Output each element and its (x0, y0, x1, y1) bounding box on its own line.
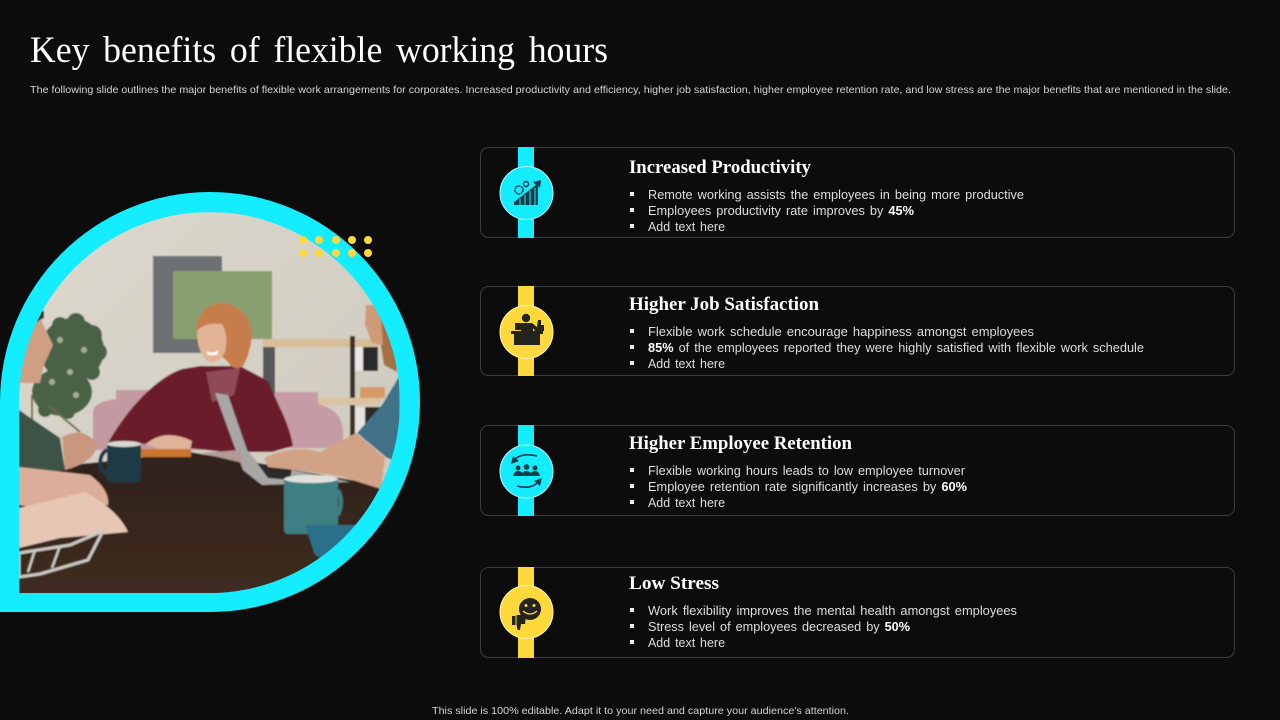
bullet list: Add text here (648, 635, 725, 650)
title: Key benefits of flexible working hours (30, 30, 608, 71)
bullet list: Add text here (648, 495, 725, 510)
heading: Increased Productivity (629, 157, 811, 178)
bullet list: Flexible working hours leads to low employee turnover (648, 463, 966, 478)
panel: increased productivity (480, 147, 1234, 238)
bullet list: Add text here (648, 356, 725, 371)
bullet list (630, 463, 967, 510)
sofa (93, 390, 210, 450)
bullet list: Work flexibility improves the mental health amongst employees (648, 603, 1017, 618)
table (19, 452, 392, 594)
bullet list: 85% of the employees reported they were highly satisfied with flexible work schedule (648, 340, 1144, 355)
heading: Higher Employee Retention (629, 433, 852, 454)
notebook (306, 524, 356, 558)
right woman (380, 318, 398, 372)
heading: Low Stress (629, 573, 719, 594)
bullet list (630, 324, 1144, 371)
bullet list: Remote working assists the employees in being more productive (648, 187, 1024, 202)
woman in red (108, 303, 293, 452)
plant (32, 313, 107, 419)
panel: low stress (480, 567, 1234, 658)
photo panel: team meeting in cyan teardrop frame (0, 192, 420, 612)
meeting photo (19, 212, 401, 594)
bullet list: Stress level of employees decreased by 50% (648, 619, 910, 634)
heading: Higher Job Satisfaction (629, 294, 819, 315)
icon: smiley with thumbs down (512, 598, 541, 630)
cyan frame (0, 192, 420, 612)
footer note: This slide is 100% editable. Adapt it to your need and capture your audience's attention. (432, 705, 849, 717)
bullet list (630, 603, 1017, 650)
icon: employee at desk with thumbs up (511, 314, 544, 345)
decorative yellow dots (299, 236, 372, 257)
bullet list: Employee retention rate significantly increases by 60% (648, 479, 967, 494)
navy mug (100, 441, 141, 482)
glasses (19, 531, 103, 577)
teal mug (284, 475, 341, 534)
bullet list: Flexible work schedule encourage happiness amongst employees (648, 324, 1034, 339)
icon: growth chart with gears (514, 180, 541, 205)
panel: higher employee retention (480, 425, 1234, 516)
front hands (19, 467, 108, 510)
bullet list (630, 187, 1024, 234)
bullet list: Employees productivity rate improves by 45% (648, 203, 914, 218)
panel: higher job satisfaction (480, 286, 1234, 376)
icon: team with cycle arrows (511, 455, 542, 487)
left man (19, 318, 53, 383)
laptop (215, 393, 350, 485)
bullet list: Add text here (648, 219, 725, 234)
subtitle: The following slide outlines the major benefits of flexible work arrangements for corporates. Increased productivity and efficiency, higher job satisfaction, higher employee retention rate, and low stress are the major benefits that are mentioned in the slide. (30, 84, 1231, 96)
